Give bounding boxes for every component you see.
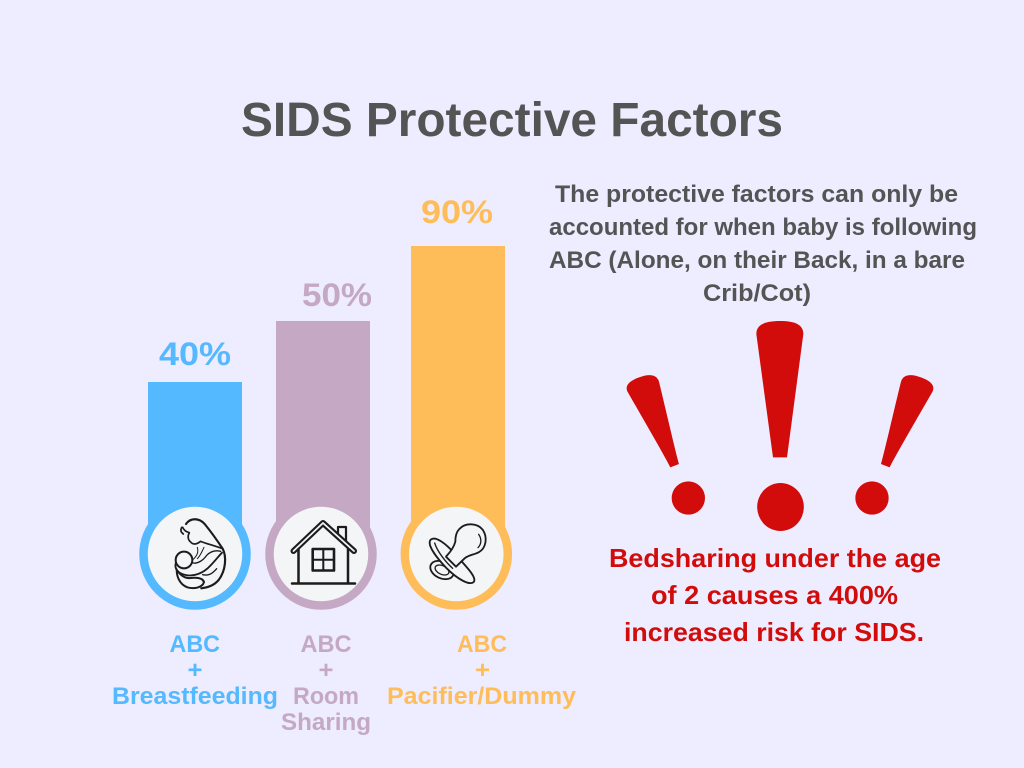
callout: bedsharing warning: of 2 causes a 400% xyxy=(651,580,898,610)
label: ABC + Pacifier/Dummy: Pacifier/Dummy xyxy=(387,683,577,710)
text block: ABC explanation: The protective factors can only be xyxy=(555,181,958,208)
bar chart xyxy=(148,194,505,554)
label: ABC + Room Sharing xyxy=(281,631,371,736)
callout: bedsharing warning: Bedsharing under the age xyxy=(609,543,941,573)
text block: ABC explanation: accounted for when baby is following xyxy=(549,214,977,241)
label: ABC + Breastfeeding xyxy=(112,631,278,710)
callout: bedsharing warning xyxy=(609,543,941,647)
bar: room sharing 50%: 50% xyxy=(302,277,372,313)
label: ABC + Pacifier/Dummy xyxy=(387,631,577,710)
label: ABC + Room Sharing: Sharing xyxy=(281,709,371,736)
label: ABC + Room Sharing: ABC xyxy=(300,631,352,658)
label: ABC + Pacifier/Dummy: + xyxy=(475,657,490,684)
icon: house xyxy=(270,502,372,606)
label: ABC + Breastfeeding: ABC xyxy=(170,631,220,658)
label: ABC + Breastfeeding: Breastfeeding xyxy=(112,683,278,710)
bar: breastfeeding 40% xyxy=(148,336,242,554)
icon: three red exclamation marks xyxy=(627,321,933,531)
text block: ABC explanation xyxy=(549,181,977,307)
icon: pacifier xyxy=(405,502,508,606)
label: ABC + Room Sharing: Room xyxy=(293,683,359,710)
text block: ABC explanation: Crib/Cot) xyxy=(703,280,811,307)
title: SIDS Protective Factors xyxy=(241,94,783,147)
label: ABC + Pacifier/Dummy: ABC xyxy=(457,631,507,658)
bar: pacifier 90%: 90% xyxy=(421,194,493,230)
icon: breastfeeding mother and baby xyxy=(144,502,246,606)
label: ABC + Room Sharing: + xyxy=(318,657,334,684)
label: ABC + Breastfeeding: + xyxy=(188,657,202,684)
text block: ABC explanation: ABC (Alone, on their Back, in a bare xyxy=(549,247,965,274)
bar: pacifier 90% xyxy=(411,194,505,554)
callout: bedsharing warning: increased risk for SIDS. xyxy=(624,617,924,647)
bar: room sharing 50% xyxy=(276,277,372,554)
bar: breastfeeding 40%: 40% xyxy=(159,336,231,372)
